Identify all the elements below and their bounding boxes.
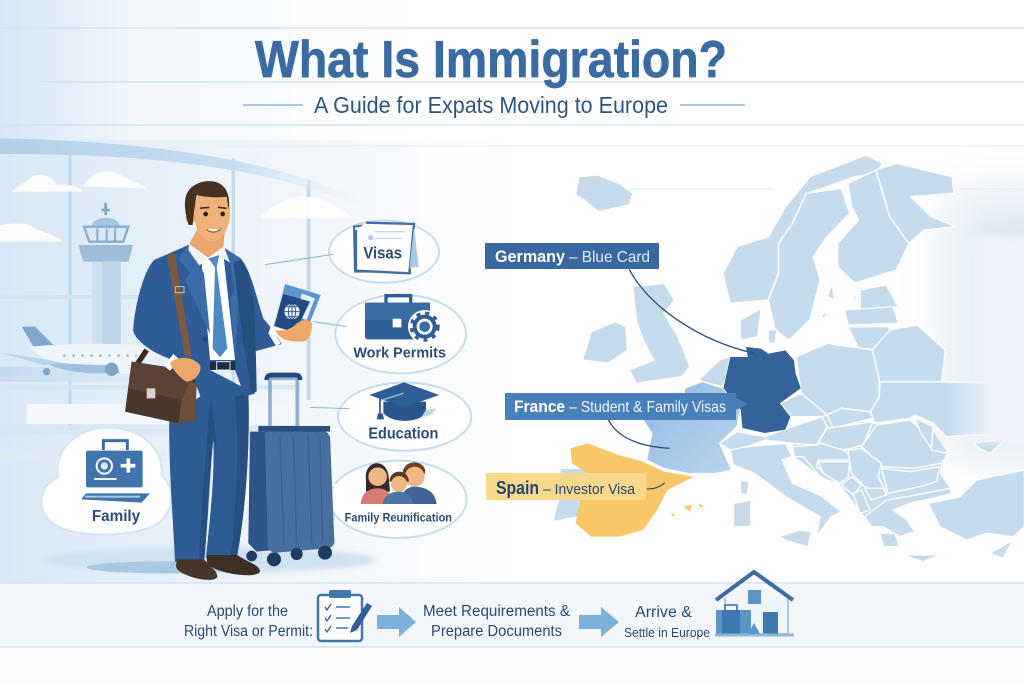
map fade to the east (947, 237, 1024, 443)
panel: Europe map (553, 155, 1024, 562)
panel: airport and traveller (0, 138, 471, 580)
shirt cuff and hand on strap (164, 354, 200, 382)
tie (208, 255, 227, 357)
country: Germany (723, 347, 801, 433)
label: France: France (514, 397, 565, 416)
label: Germany: – Blue Card (569, 249, 650, 266)
passport in hand (274, 284, 321, 342)
icon: house and luggage (715, 572, 794, 635)
step 2 text: Meet Requirements & (423, 603, 571, 620)
collar (188, 243, 230, 266)
cuff (268, 327, 281, 346)
label: France: – Student & Family Visas (569, 399, 726, 416)
step 1 text: Right Visa or Permit: (184, 623, 313, 640)
icon: clipboard (318, 590, 372, 641)
shoulder bag (125, 253, 197, 423)
jacket silhouette (133, 245, 282, 399)
icon bubble: Work Permits (335, 295, 466, 373)
suitcase (246, 375, 334, 566)
label: Germany (485, 243, 659, 269)
title: What Is Immigration? (255, 31, 727, 89)
neck and head (189, 230, 225, 258)
jacket button (202, 337, 208, 342)
icon bubble: Family Reunification (329, 461, 467, 538)
belt (210, 362, 235, 370)
label: Spain: Spain (496, 478, 539, 498)
icon bubble: Family Reunification: Family Reunification (345, 510, 452, 524)
country: France (643, 382, 740, 473)
control tower (78, 203, 133, 348)
arrow 2 (579, 607, 619, 637)
step 2 text: Prepare Documents (431, 623, 562, 640)
connector lines (265, 254, 349, 486)
shirt (190, 245, 235, 360)
step 3 text (624, 604, 710, 640)
label: France (505, 393, 748, 420)
lapels (178, 245, 241, 360)
continental base fill (792, 415, 952, 527)
label: Germany: Germany (495, 247, 566, 266)
icon bubble: Education: Education (368, 425, 438, 442)
icon bubble: Education (338, 382, 471, 451)
label: Spain (486, 473, 646, 500)
neighbouring countries (553, 155, 1024, 562)
ground shadow (43, 547, 377, 573)
icon bubble: Family: Family (92, 508, 141, 525)
trousers (169, 370, 249, 562)
icon bubble: Visas: Visas (363, 243, 402, 262)
step 3 text: Arrive & (635, 604, 693, 621)
country: Spain (570, 443, 704, 537)
man in suit (125, 181, 321, 580)
subtitle: A Guide for Expats Moving to Europe (314, 92, 668, 118)
clouds (0, 171, 353, 242)
icon bubble: Work Permits: Work Permits (353, 346, 446, 362)
airplane (0, 327, 143, 376)
step 3 text: Settle in Europe (624, 625, 710, 640)
icon bubble: Family (41, 428, 171, 535)
arrow 1 (377, 607, 416, 637)
panel: steps band (0, 572, 1024, 647)
label: Spain: – Investor Visa (543, 481, 636, 498)
airport window background (0, 138, 387, 462)
callout arrows (608, 269, 754, 489)
shoes (176, 559, 217, 580)
step 1 text: Apply for the (207, 603, 288, 620)
icon bubble: Visas (329, 221, 439, 283)
